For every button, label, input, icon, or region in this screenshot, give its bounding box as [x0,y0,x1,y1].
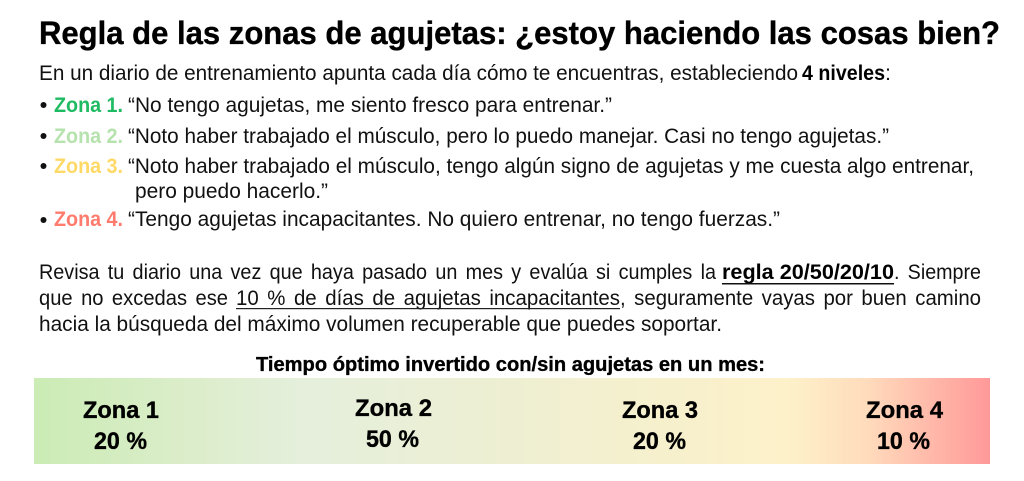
zone 2 share: Zona 2 [355,395,432,422]
zone 3 item: pero puedo hacerlo.” [135,179,328,203]
zone 4 share: 10 % [877,428,930,455]
zone 4 share: Zona 4 [866,397,944,424]
explanatory paragraph: 10 % de días de agujetas incapacitantes [236,286,620,310]
zone 1 share: Zona 1 [83,397,159,424]
zone 4 item: Zona 4. [54,207,123,231]
zone 2 share: 50 % [366,426,419,453]
zone 1 item: Zona 1. [54,93,123,117]
zone 3 item: “Noto haber trabajado el músculo, tengo algún signo de agujetas y me cuesta algo entrenar, [128,154,974,178]
zone 4 item: “Tengo agujetas incapacitantes. No quiero entrenar, no tengo fuerzas.” [128,207,780,231]
explanatory paragraph: , seguramente vayas por buen camino [620,286,981,310]
zone 1 share: 20 % [94,428,147,455]
explanatory paragraph [39,260,981,336]
explanatory paragraph: Revisa tu diario una vez que haya pasado un mes y evalúa si cumples la [39,260,716,284]
zone 3 share [622,397,698,455]
zone 3 share: Zona 3 [622,397,698,424]
chart heading: Tiempo óptimo invertido con/sin agujetas en un mes: [256,353,765,376]
zone 2 item: “Noto haber trabajado el músculo, pero lo puedo manejar. Casi no tengo agujetas.” [128,124,889,148]
zone 4 share [866,397,944,455]
zone 2 item: Zona 2. [54,124,123,148]
zone 2 share [355,395,432,453]
zone 3 item [40,154,974,203]
zone 3 share: 20 % [633,428,686,455]
intro text: 4 niveles [802,61,885,85]
intro text: : [885,61,891,85]
zone distribution gradient bar [34,378,990,464]
title: Regla de las zonas de agujetas: ¿estoy haciendo las cosas bien? [39,15,1000,51]
explanatory paragraph: que no excedas ese [39,286,228,310]
explanatory paragraph: hacia la búsqueda del máximo volumen recuperable que puedes soportar. [39,312,722,336]
explanatory paragraph: . Siempre [894,260,981,284]
zone 1 share [83,397,159,455]
explanatory paragraph: regla 20/50/20/10 [722,260,894,284]
intro text: En un diario de entrenamiento apunta cada día cómo te encuentras, estableciendo [39,61,798,85]
zone 3 item: Zona 3. [54,154,123,178]
zone list [40,93,974,231]
zone 1 item: “No tengo agujetas, me siento fresco para entrenar.” [128,93,612,117]
